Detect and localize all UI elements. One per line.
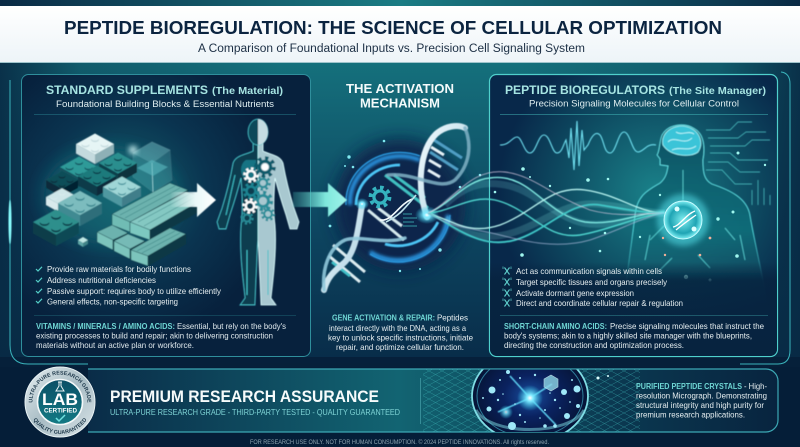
mechanism description: Peptides [437,314,468,322]
crystal caption: resolution Micrograph. Demonstrating [636,390,767,400]
description: existing processes to build and repair; akin to delivering construction [36,332,273,340]
gear icon [370,188,390,206]
icon: human body with gears [217,119,299,305]
panel: peptide bioregulators [428,74,778,356]
bullet list: Direct and coordinate cellular repair & regulation [516,299,683,308]
panel foot shade [490,262,777,356]
illustration: DNA helix [324,126,481,290]
mechanism description: repair, and optimize cellular function. [336,343,464,352]
lumber beams [97,183,205,266]
arrow: body to DNA [293,183,347,217]
mechanism heading [346,81,454,110]
assurance heading: PREMIUM RESEARCH ASSURANCE [110,387,379,406]
badge: lab certified: ULTRA-PURE RESEARCH GRADE [28,370,92,402]
bullet list [36,265,222,306]
description: body's systems; akin to a highly skilled site manager with the blueprints, [504,332,752,340]
bullet list: Act as communication signals within cells [516,267,662,276]
image: purified peptide crystals [423,370,640,432]
panel heading: (The Site Manager) [669,85,766,97]
crystal caption: premium research applications. [636,410,745,420]
mechanism heading: THE ACTIVATION [346,81,454,96]
mechanism description: key to unlock specific instructions, initiate [328,334,473,342]
panel: research assurance [88,368,779,433]
signal particles [494,152,766,282]
assurance tagline: ULTRA-PURE RESEARCH GRADE - THIRD-PARTY TESTED - QUALITY GUARANTEED [110,407,400,417]
panel heading [505,83,766,97]
illustration: building blocks [33,134,205,266]
description: materials without an active plan or workforce. [36,341,194,350]
badge: lab certified: QUALITY GUARANTEED [34,418,86,434]
description: Essential, but rely on the body's [177,322,286,331]
mechanism description: interact directly with the DNA, acting as a [329,324,466,333]
bullet list: Address nutritional deficiencies [47,276,156,285]
badge: lab certified: CERTIFIED [44,408,78,414]
figure: human silhouette with brain [622,125,770,318]
panel: activation mechanism [293,81,481,352]
bullet list: Activate dormant gene expression [516,289,634,298]
small DNA [380,195,416,222]
footer note: FOR RESEARCH USE ONLY. NOT FOR HUMAN CONSUMPTION. © 2024 PEPTIDE INNOVATIONS. All rights reserved. [250,439,549,446]
description: directing the construction and optimization process. [504,341,684,350]
waves [428,172,665,244]
mechanism description: GENE ACTIVATION & REPAIR: [332,314,435,322]
crystal caption: PURIFIED PEPTIDE CRYSTALS [636,381,742,391]
panel heading: PEPTIDE BIOREGULATORS [505,83,665,97]
description: Precise signaling molecules that instruct the [610,322,764,331]
panel: standard supplements [22,74,310,356]
bullet list [503,266,683,308]
crystal caption: structural integrity and high purity for [636,400,764,410]
panel subheading: Precision Signaling Molecules for Cellular Control [529,98,739,108]
bullet list: Passive support: requires body to utilize efficiently [47,287,222,296]
mechanism description [328,314,473,352]
description [504,322,764,350]
title: PEPTIDE BIOREGULATION: THE SCIENCE OF CELLULAR OPTIMIZATION [64,17,722,38]
description [36,322,286,350]
panel heading: (The Material) [212,85,283,97]
subtitle: A Comparison of Foundational Inputs vs. Precision Cell Signaling System [198,43,585,55]
bullet list: General effects, non-specific targeting [47,298,178,306]
signal waveform [500,121,656,170]
badge: lab certified: LAB [42,390,78,409]
peptide orb [657,194,709,246]
arrow: materials to body [170,183,216,217]
description: SHORT-CHAIN AMINO ACIDS: [504,322,607,331]
header band [0,6,800,63]
crystal caption [636,381,767,420]
circuit traces [706,122,770,205]
crystal caption: - High- [744,381,767,391]
description: VITAMINS / MINERALS / AMINO ACIDS: [36,322,175,331]
bullet list: Target specific tissues and organs precisely [516,278,668,287]
panel subheading: Foundational Building Blocks & Essential Nutrients [56,99,275,109]
glass box [129,142,172,192]
panel heading: STANDARD SUPPLEMENTS [46,83,208,97]
badge: lab certified [24,366,96,438]
mechanism heading: MECHANISM [360,96,440,110]
panel heading [46,83,283,97]
bullet list: Provide raw materials for bodily functions [47,265,191,274]
